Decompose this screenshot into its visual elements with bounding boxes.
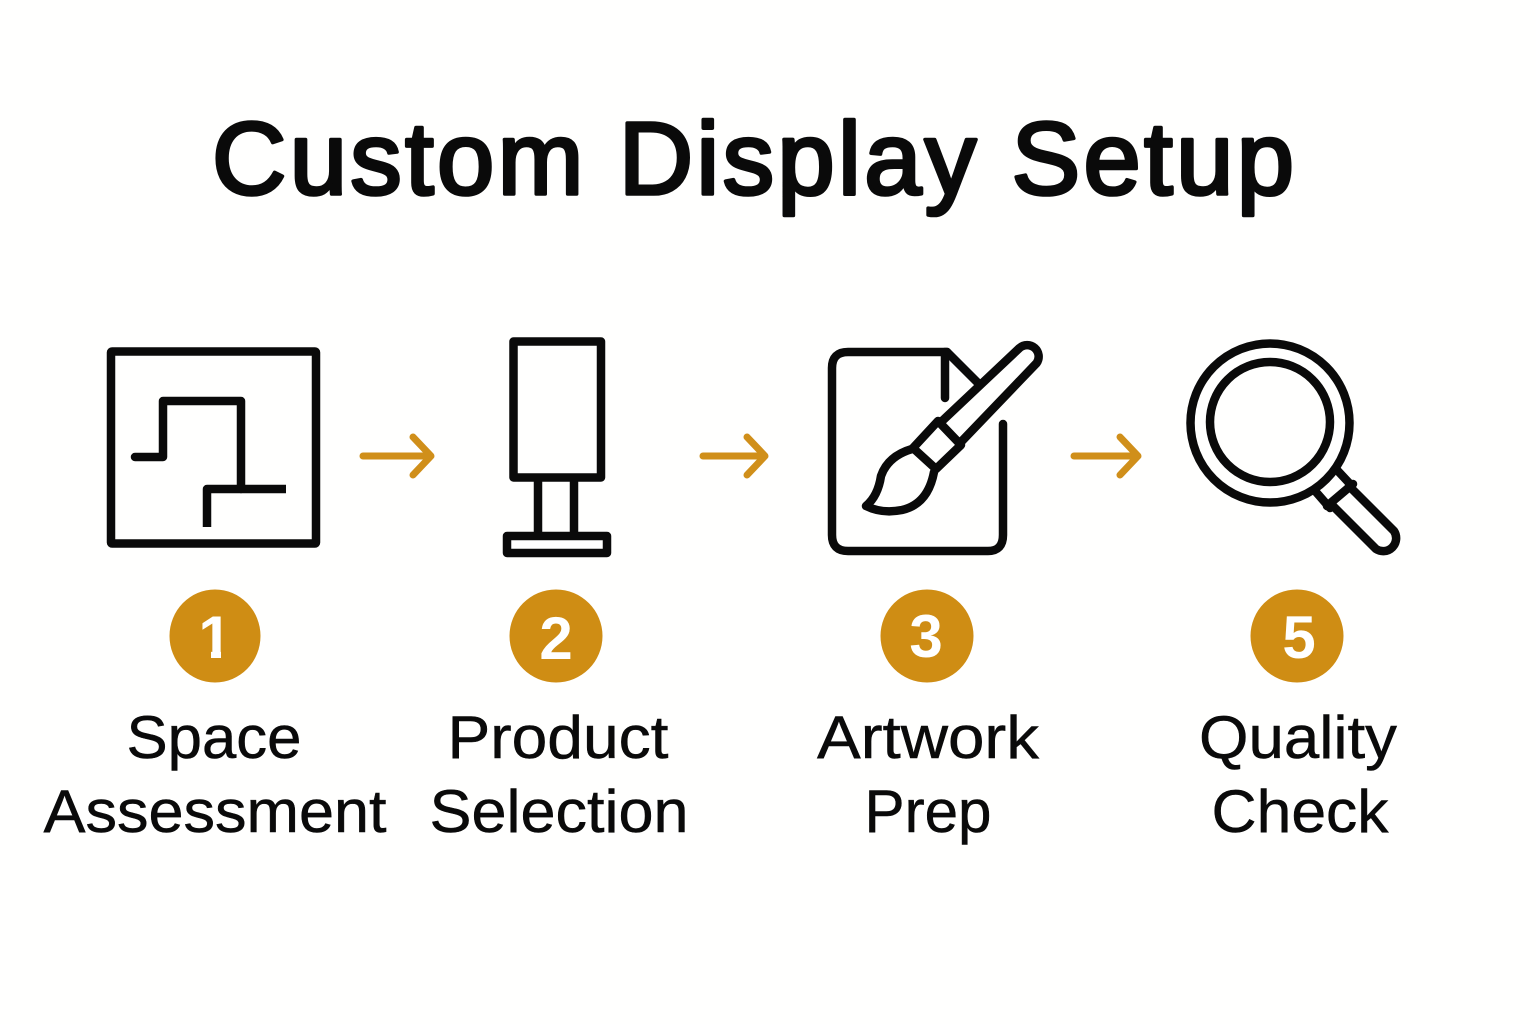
label: Space Assessment: Assessment (44, 778, 387, 845)
icon: magnifying glass (1190, 344, 1396, 551)
step 2 badge (510, 590, 602, 682)
step 5 badge (1250, 590, 1344, 682)
icon: artwork page and brush (832, 345, 1039, 551)
label: Product Selection: Selection (430, 778, 688, 845)
label: Quality Check: Quality (1199, 704, 1397, 771)
label: Product Selection (430, 704, 688, 845)
label: Quality Check (1199, 704, 1397, 845)
arrow 3 (1074, 437, 1138, 475)
label: Artwork Prep: Artwork (817, 704, 1040, 771)
label: Artwork Prep (817, 704, 1040, 845)
step 1 badge (170, 590, 260, 682)
step 1 badge: 1 (198, 604, 232, 671)
step 3 badge: 3 (909, 603, 943, 670)
label: Space Assessment (44, 704, 387, 845)
arrow 1 (363, 437, 431, 475)
title: Custom Display Setup (212, 101, 1294, 216)
label: Product Selection: Product (448, 704, 669, 771)
arrow 2 (703, 437, 765, 475)
icon: floor plan (111, 352, 316, 544)
label: Space Assessment: Space (126, 704, 302, 771)
step 3 badge (880, 590, 974, 682)
icon: display stand (507, 342, 607, 553)
step 2 badge: 2 (539, 605, 573, 672)
label: Quality Check: Check (1212, 778, 1390, 845)
label: Artwork Prep: Prep (864, 778, 992, 845)
step 5 badge: 5 (1282, 604, 1316, 671)
